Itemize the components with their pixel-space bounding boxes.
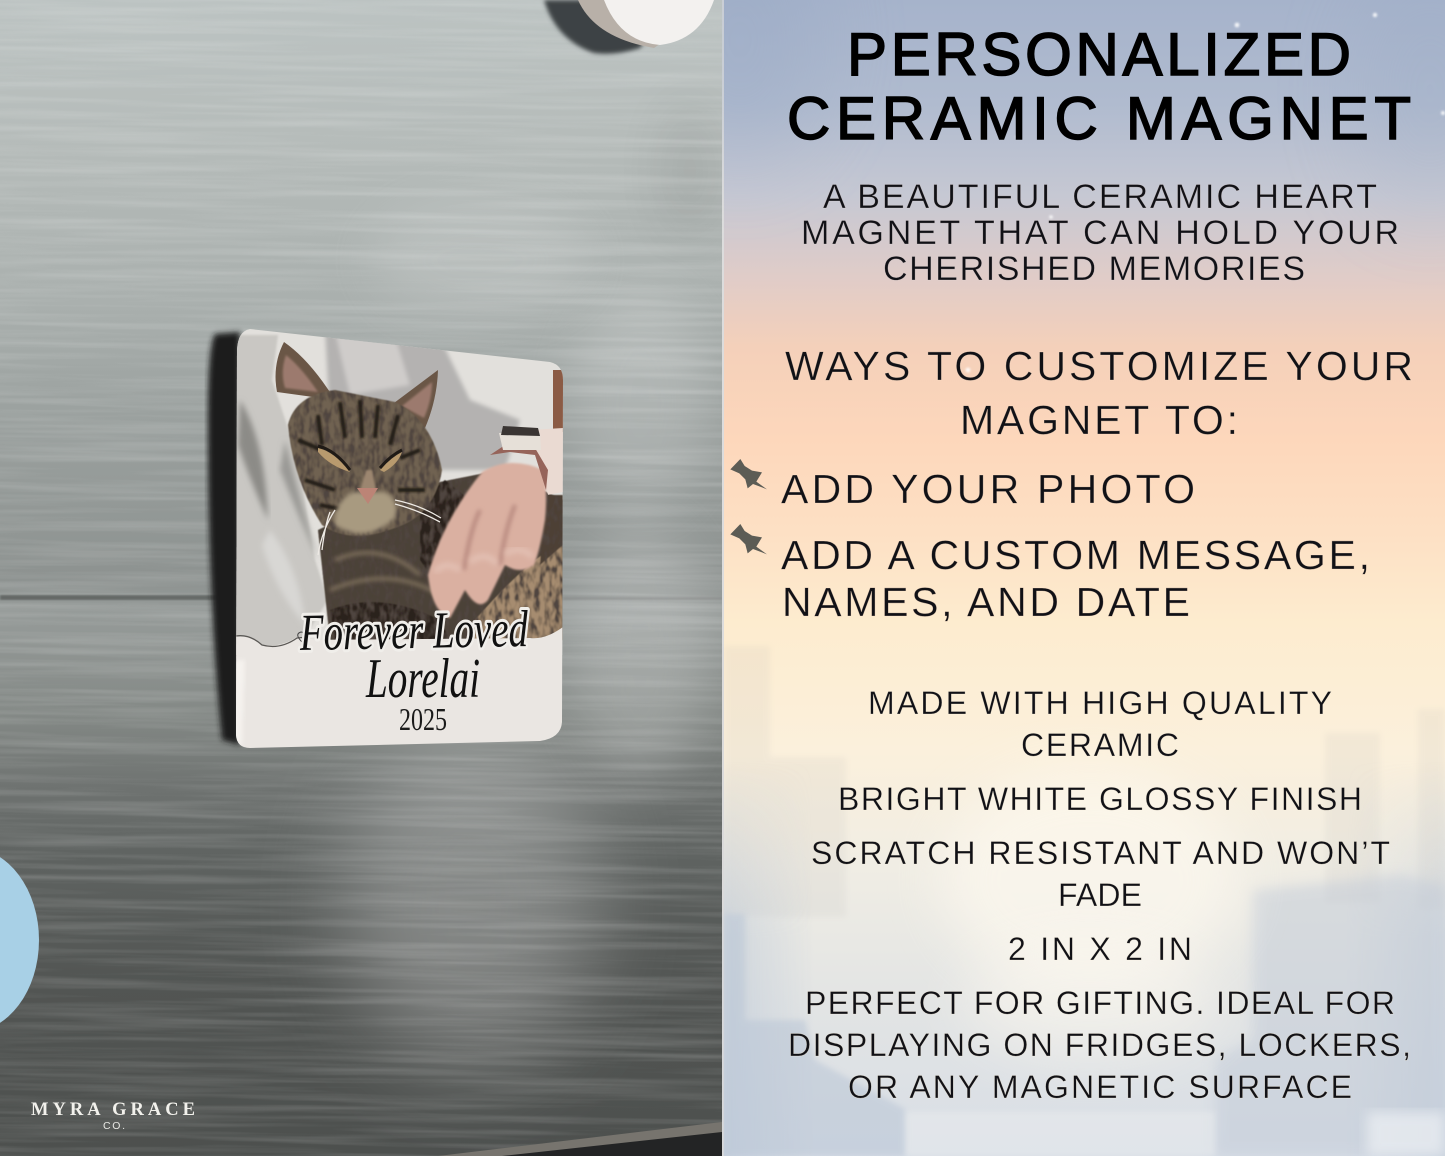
- subtitle text block: CHERISHED MEMORIES: [883, 250, 1305, 288]
- white band: [236, 628, 562, 748]
- feature: gifting: DISPLAYING ON FRIDGES, LOCKERS,: [788, 1027, 1411, 1063]
- feature: finish: BRIGHT WHITE GLOSSY FINISH: [838, 781, 1362, 817]
- cat ears: [276, 342, 438, 428]
- cat muzzle: [335, 492, 396, 534]
- icon: pushpin 2: [730, 524, 767, 554]
- heading: ways to customize: WAYS TO CUSTOMIZE YOUR: [785, 343, 1413, 389]
- photo on magnet: [230, 325, 570, 760]
- sleeve and wrist: [536, 428, 563, 495]
- title: PERSONALIZED: [847, 21, 1351, 88]
- icon: blue round magnet at left: [0, 848, 39, 1032]
- subtitle text block: MAGNET THAT CAN HOLD YOUR: [801, 214, 1399, 252]
- stars: [966, 13, 1445, 372]
- hand: [428, 463, 546, 618]
- heading: ways to customize: MAGNET TO:: [960, 397, 1238, 443]
- title: CERAMIC MAGNET: [787, 85, 1411, 152]
- cat eyes: [318, 446, 402, 472]
- magnet text: Forever Loved: [299, 601, 529, 662]
- text block: product features: [788, 685, 1411, 1105]
- feature: quality: CERAMIC: [1021, 727, 1179, 763]
- heading: ways to customize: [785, 343, 1413, 443]
- logo: Myra Grace Co.: [31, 1100, 195, 1132]
- list: customization options: [730, 459, 1370, 625]
- magnet text: Lorelai: [365, 648, 480, 710]
- option: add custom message: ADD A CUSTOM MESSAGE,: [781, 532, 1370, 578]
- icon: pushpin 1: [730, 459, 767, 489]
- panel: sky and city background: [660, 0, 1445, 1156]
- feature: quality: MADE WITH HIGH QUALITY: [868, 685, 1332, 721]
- grey sweater: [325, 328, 520, 470]
- magnet text: 2025: [399, 701, 447, 737]
- feature: gifting: [788, 985, 1411, 1105]
- subtitle text block: A BEAUTIFUL CERAMIC HEART: [823, 178, 1377, 216]
- feature: durability: FADE: [1058, 877, 1142, 913]
- tail fur: [470, 495, 563, 640]
- icon: white round magnet at top: [544, 0, 714, 54]
- logo: Myra Grace Co.: MYRA GRACE: [31, 1100, 195, 1120]
- feature: durability: [811, 835, 1390, 913]
- heart: [297, 632, 303, 642]
- cat nose: [357, 488, 378, 504]
- feature: durability: SCRATCH RESISTANT AND WON’T: [811, 835, 1390, 871]
- watch: [490, 426, 548, 490]
- feature: size: 2 IN X 2 IN: [1008, 931, 1192, 967]
- whiskers: [318, 500, 441, 555]
- magnet shadow: [208, 332, 240, 745]
- faint city skyline: [724, 646, 1445, 1156]
- magnet product: [208, 325, 570, 760]
- logo: Myra Grace Co.: CO.: [103, 1120, 125, 1132]
- subtitle text block: [801, 178, 1399, 288]
- option: add your photo: ADD YOUR PHOTO: [781, 466, 1195, 512]
- fridge bottom edge: [438, 1122, 722, 1156]
- panel: brushed metal fridge photo: [0, 0, 746, 1156]
- cat body: [318, 470, 563, 640]
- title: [787, 21, 1411, 152]
- feature: quality: [868, 685, 1332, 763]
- cat head: [288, 390, 442, 536]
- option: add custom message: NAMES, AND DATE: [782, 579, 1190, 625]
- feature: gifting: PERFECT FOR GIFTING. IDEAL FOR: [805, 985, 1395, 1021]
- grey blanket: [232, 335, 328, 660]
- fridge seam line: [0, 595, 723, 600]
- option: add custom message: [781, 532, 1370, 625]
- feature: gifting: OR ANY MAGNETIC SURFACE: [848, 1069, 1352, 1105]
- magnet text: [299, 601, 529, 737]
